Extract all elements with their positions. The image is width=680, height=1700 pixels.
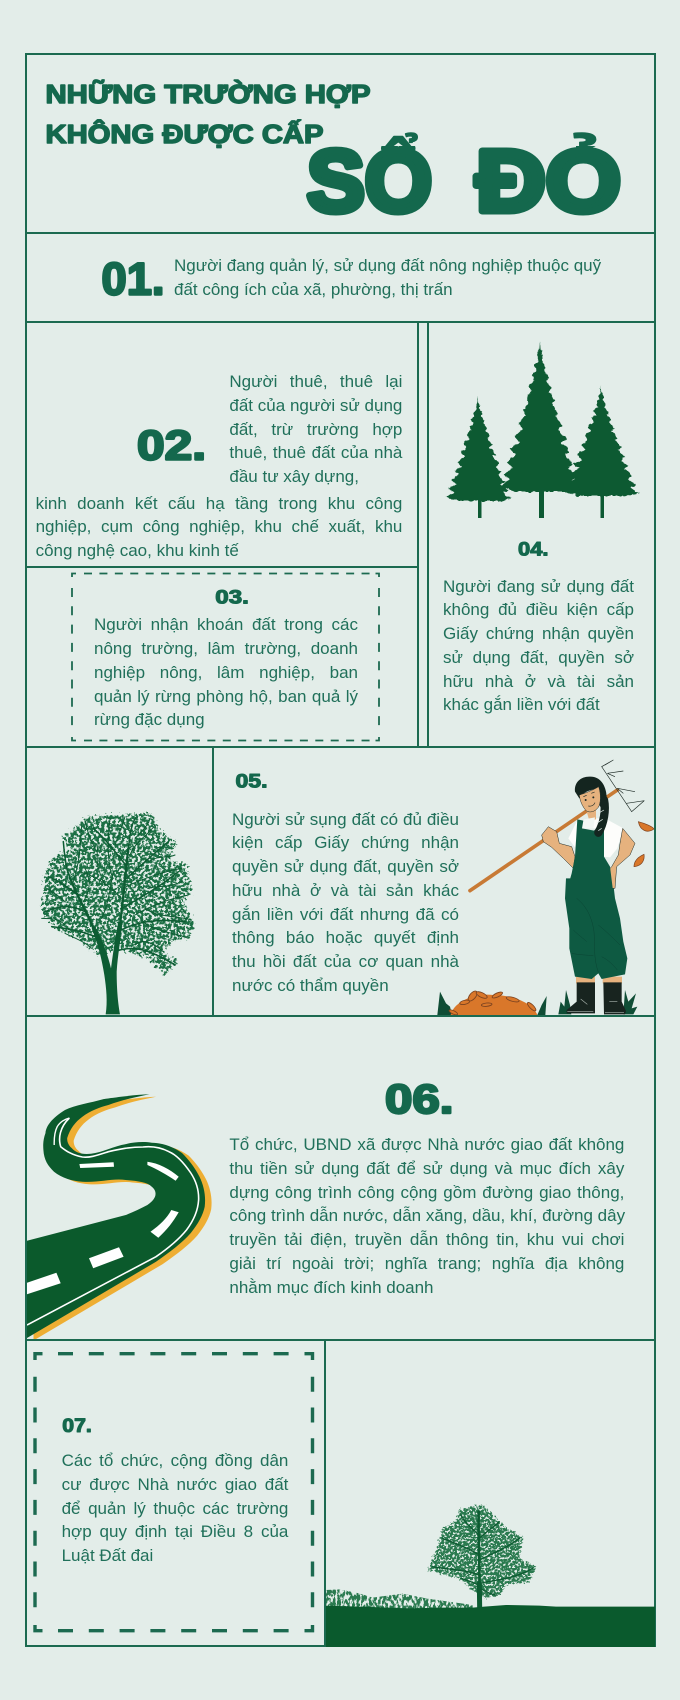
icon: winding road: [27, 1094, 212, 1339]
illustration: lone tree on meadow: [326, 1504, 655, 1647]
panel: landscape with lone tree: [324, 1339, 656, 1647]
number 01: 01.: [102, 254, 164, 305]
heading: sổ đỏ: SỔ: [307, 133, 432, 230]
text 02 upper: đất, trừ trường hợp: [229, 420, 402, 439]
text 02 upper: đất của người sử dụng: [229, 396, 402, 415]
text 05: gắn liền với đất nhưng đã có: [232, 905, 459, 924]
text 03: nông trường, lâm trường, doanh: [94, 639, 358, 658]
text 05: thu hồi đất của cơ quan nhà: [232, 952, 459, 971]
text 07: [62, 1451, 288, 1565]
text 05: [232, 810, 459, 995]
panel: item 05: [212, 746, 656, 1017]
text 03: quản lý rừng phòng hộ, ban quả lý: [94, 687, 358, 706]
text 06: dựng công trình công cộng gồm đường giao thông,: [229, 1183, 624, 1202]
text 02 lower: kinh doanh kết cấu hạ tầng trong khu công: [36, 494, 402, 512]
number 02: 02.: [137, 421, 206, 468]
text 05: hữu nhà ở và tài sản khác: [232, 881, 459, 900]
number 07: 07.: [62, 1415, 92, 1437]
number 03: 03.: [215, 586, 249, 608]
heading: sổ đỏ: SỔ: [307, 133, 432, 230]
panel: item 04: [427, 321, 656, 748]
text 02 lower: công nghệ cao, khu kinh tế: [36, 541, 239, 560]
text 02 upper: [229, 372, 402, 486]
text 04: Người đang sử dụng đất: [443, 576, 634, 596]
number 05: 05.: [236, 770, 268, 792]
icon: rake: [470, 760, 644, 891]
icon: three fir trees: [446, 342, 640, 518]
heading: những trường hợp không được cấp: [46, 79, 370, 149]
text 02 upper: đầu tư xây dựng,: [229, 467, 359, 486]
panel: item 03: [25, 566, 419, 748]
heading: những trường hợp không được cấp: NHỮNG TRƯỜNG HỢP: [46, 79, 370, 109]
upper body: [542, 777, 635, 893]
text 02 upper: thuê, thuê đất của nhà: [229, 443, 402, 462]
heading: sổ đỏ: [306, 132, 621, 216]
icon: leaf pile: [448, 989, 537, 1016]
text 04: sử dụng đất, quyền sở: [443, 648, 634, 667]
text 07: Các tổ chức, cộng đồng dân: [62, 1451, 288, 1470]
heading: sổ đỏ: ĐỎ: [476, 133, 621, 230]
text 07: hợp quy định tại Điều 8 của: [62, 1522, 288, 1541]
number 06: 06.: [385, 1076, 454, 1122]
number 04: 04.: [518, 538, 548, 560]
text 05: quyền sử dụng đất, quyền sở: [232, 857, 459, 876]
text 04: [443, 576, 634, 714]
panel: title: [25, 53, 656, 234]
panel: tree left of item 05: [25, 746, 214, 1017]
text 07: Luật Đất đai: [62, 1546, 153, 1565]
panel: item 07: [25, 1339, 326, 1647]
lower body: [565, 878, 627, 1014]
text 05: nước có thẩm quyền: [232, 976, 389, 995]
text 07: cư được Nhà nước giao đất: [62, 1475, 288, 1494]
text 03: nghiệp nông, lâm nghiệp, ban: [94, 663, 358, 682]
text 04: Giấy chứng nhận quyền: [443, 624, 634, 643]
icon: grass tufts: [437, 990, 637, 1015]
text 01: [174, 256, 602, 299]
text 05: kiện cấp Giấy chứng nhận: [232, 833, 459, 852]
icon: woman: [542, 777, 635, 1014]
text 01: Người đang quản lý, sử dụng đất nông nghiệp thuộc quỹ: [174, 256, 601, 275]
text 01: đất công ích của xã, phường, thị trấn: [174, 280, 453, 299]
text 06: [229, 1135, 626, 1297]
text 03: Người nhận khoán đất trong các: [94, 615, 358, 634]
illustration: woman with rake and leaf pile: [437, 760, 654, 1015]
dashed frame 07: [33, 1352, 314, 1632]
panel: item 01: [25, 232, 656, 323]
text 06: nhằm mục đích kinh doanh: [229, 1278, 434, 1297]
text 06: truyền tải điện, truyền dẫn thông tin, khu vui chơi: [229, 1230, 624, 1249]
text 06: Tổ chức, UBND xã được Nhà nước giao đất không: [229, 1135, 624, 1154]
text 06: thu tiền sử dụng đất để sử dụng và mục đích xây: [229, 1159, 624, 1178]
text 05: thông báo hoặc quyết định: [232, 928, 459, 947]
text 05: Người sử sụng đất có đủ điều: [232, 810, 459, 828]
dashed frame 03: [71, 572, 380, 742]
text 06: giải trí ngoài trời; nghĩa trang; nghĩa địa không: [229, 1254, 624, 1273]
text 07: để quản lý thuộc các trường: [62, 1499, 288, 1518]
text 03: [94, 615, 358, 729]
text 04: khác gắn liền với đất: [443, 695, 600, 714]
text 06: công trình dẫn nước, dẫn xăng, dầu, khí, đường dây: [229, 1206, 625, 1225]
heading: những trường hợp không được cấp: KHÔNG ĐƯỢC CẤP: [46, 119, 324, 149]
text 02 lower: [36, 494, 402, 560]
icon: falling leaves: [634, 822, 654, 867]
text 02 lower: nghiệp, cụm công nghiệp, khu chế xuất, khu: [36, 517, 402, 536]
heading: sổ đỏ: ĐỎ: [476, 133, 621, 230]
text 02 upper: Người thuê, thuê lại: [229, 372, 402, 391]
text 04: hữu nhà ở và tài sản: [443, 672, 634, 691]
panel: item 02: [25, 321, 419, 568]
text 04: không đủ điều kiện cấp: [443, 600, 634, 619]
panel: item 06: [25, 1015, 656, 1341]
icon: leafy tree: [40, 812, 196, 1014]
text 03: rừng đặc dụng: [94, 710, 205, 729]
